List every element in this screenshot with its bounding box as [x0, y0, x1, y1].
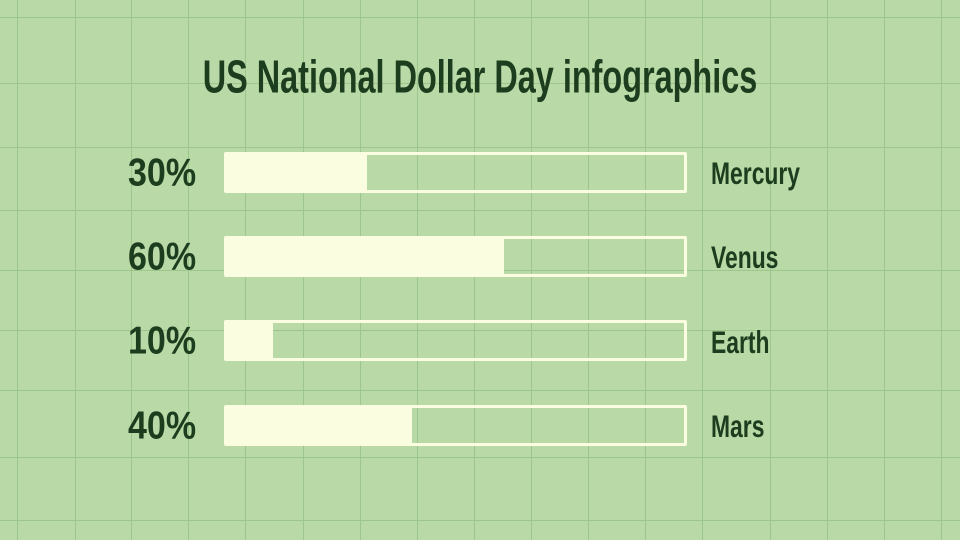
row: Venus [128, 235, 778, 279]
name label: Venus [711, 239, 778, 275]
value label: 40% [128, 404, 196, 448]
row: Earth [128, 319, 769, 363]
value label: 10% [128, 319, 196, 363]
bar [224, 236, 687, 277]
value label: 60% [128, 235, 196, 279]
name label: Mercury [711, 155, 800, 191]
bar [224, 320, 687, 361]
row: Mercury [128, 151, 800, 195]
value label: 30% [128, 151, 196, 195]
name label: Earth [711, 324, 769, 360]
bar [224, 405, 687, 446]
name label: Mars [711, 408, 764, 444]
bar [224, 152, 687, 193]
title: US National Dollar Day infographics [203, 52, 757, 103]
row: Mars [128, 404, 764, 448]
